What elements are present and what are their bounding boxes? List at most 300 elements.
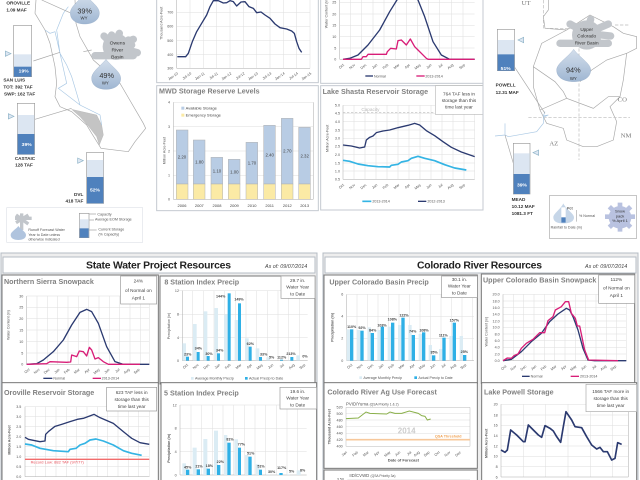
label: Powell: 12.31 MAF <box>496 90 519 95</box>
callout: to Date <box>290 291 306 296</box>
title bar: Colorado River Resources <box>417 260 542 272</box>
callout <box>107 387 157 411</box>
average monthly bars <box>182 308 300 361</box>
month labels: Jun <box>426 63 433 70</box>
month labels: Oct <box>434 450 441 457</box>
icon: Upper Colorado snowflake <box>560 19 611 50</box>
y axis labels: 20 <box>494 403 498 407</box>
month labels: Mar <box>235 363 243 370</box>
y axis labels: 20 <box>332 12 336 16</box>
bar value labels: 117% <box>277 466 287 470</box>
chart subtitle: PVID/Yuma (QSA Priority 1 & 2) <box>346 402 399 407</box>
bar value labels: 21% <box>195 465 203 469</box>
month labels <box>182 363 306 371</box>
legend: 2013-2014 <box>580 375 597 379</box>
title bar <box>325 257 636 273</box>
label: Oroville: OROVILLE <box>6 0 30 5</box>
icon: Upper Colorado drop: 94% <box>566 66 581 75</box>
tank: Mead: 39% <box>517 183 528 189</box>
callout: storage than this <box>114 397 150 402</box>
icon: Owens runoff drop: 49% <box>99 71 114 80</box>
icon: Oroville runoff drop: WY <box>81 16 88 21</box>
record low line <box>25 457 149 461</box>
callout <box>435 86 483 114</box>
2013-2014 line <box>503 302 618 361</box>
legend: storage and runoff key <box>7 208 143 242</box>
x axis labels: Jul-10 <box>182 72 192 81</box>
year labels: 2006 <box>178 203 187 208</box>
month labels: Dec <box>203 363 210 370</box>
y axis labels: 2.0 <box>495 352 500 356</box>
callout: to Date <box>290 402 306 407</box>
y axis labels: 4 <box>177 336 179 340</box>
bar value labels: 30% <box>205 352 213 356</box>
year labels: 2011 <box>265 203 275 208</box>
y axis labels: 10 <box>332 35 336 39</box>
bar values: 1.00 <box>230 169 239 174</box>
icon: Oroville runoff drop: 39% <box>77 7 92 16</box>
y axis labels: 14.0 <box>493 313 500 317</box>
y axis labels: 3.0 <box>16 415 21 419</box>
x axis labels <box>167 72 312 81</box>
year watermark: 2014 <box>398 426 416 435</box>
tank: Powell: 51% <box>501 66 511 72</box>
y axis labels: 400 <box>167 53 173 57</box>
callout: 30.1 in. <box>452 277 467 282</box>
legend: Average Monthly Precip <box>195 377 234 381</box>
y axis labels: 5 <box>21 351 23 355</box>
y axis labels: 3.5 <box>335 128 340 132</box>
legend: Average Monthly Precip <box>363 376 402 380</box>
storage line <box>177 1 302 57</box>
y axis labels: 0 <box>341 359 343 363</box>
y axis title: Million Acre-Feet <box>7 425 11 455</box>
x axis labels: Jul-14 <box>288 72 299 81</box>
x axis labels: Jul-13 <box>262 72 272 81</box>
bar value labels: 5% <box>269 356 275 360</box>
normal line <box>503 308 626 361</box>
y axis labels: 700 <box>167 11 173 15</box>
title bar: As of: 09/07/2014 <box>584 264 627 270</box>
legend: 2013-2014 <box>102 377 119 381</box>
icon: Owens runoff drop <box>92 59 121 89</box>
y axis labels: 30 <box>19 294 23 298</box>
month labels: Mar <box>393 183 401 190</box>
y axis labels: 5 <box>334 46 336 50</box>
storage line <box>501 412 622 460</box>
label: San Luis: SAN LUIS <box>3 78 25 83</box>
y axis labels: 18.0 <box>493 299 500 303</box>
y axis labels: 14 <box>494 434 498 438</box>
x axis labels: Jan-14 <box>274 72 286 81</box>
title bar: State Water Project Resources <box>86 260 231 272</box>
month labels: Oct <box>338 63 345 70</box>
legend: storage and runoff key: Year to Date unless <box>28 233 60 237</box>
y axis labels: 8 <box>177 313 179 317</box>
bar value labels: 51% <box>257 465 265 469</box>
callout: Water Year <box>286 396 310 401</box>
heading: Upper Colorado Basin Snowpack <box>483 277 596 285</box>
y axis labels: 25 <box>19 306 23 310</box>
label: San Luis: SWP: 162 TAF <box>4 91 35 96</box>
month labels: Mar <box>393 63 401 70</box>
y axis labels: 3 <box>168 125 170 129</box>
month labels: Aug <box>449 363 457 370</box>
month labels: Sep <box>299 363 306 370</box>
month labels: Feb <box>540 364 547 371</box>
legend: 2013-2014 <box>372 200 390 204</box>
state labels: CO <box>618 96 627 103</box>
y axis labels: 16.0 <box>493 306 500 310</box>
icon: Oroville runoff drop <box>70 0 99 24</box>
month labels: May <box>256 363 264 371</box>
callout: 764 TAF less in <box>443 91 475 96</box>
month labels: Sep <box>423 450 431 458</box>
y axis title: Million Acre-Feet <box>326 125 330 152</box>
month labels: Jan <box>371 183 378 190</box>
month labels: Aug <box>123 368 131 375</box>
month labels: Sep <box>458 183 466 190</box>
legend: rainfall and snowpack key: Snow <box>615 209 625 214</box>
bar value labels: 144% <box>216 294 226 298</box>
month labels: Jul <box>591 364 597 370</box>
y axis labels: 600 <box>167 25 173 29</box>
y axis labels: 2.0 <box>335 153 340 157</box>
bar values: 2.40 <box>265 152 274 157</box>
month labels <box>338 183 466 191</box>
y axis labels: 8 <box>496 465 498 469</box>
month labels: Nov <box>348 63 356 70</box>
panel: Thousand acre-feet line chart <box>157 0 318 83</box>
y axis labels: 2.0 <box>16 435 21 439</box>
panel: Oroville Reservoir Storage: Record Low: 882 TAF (9/7/77) <box>31 460 85 465</box>
month labels: Oct <box>500 364 507 371</box>
right edge divider for top charts <box>482 0 484 210</box>
month labels: Nov <box>33 368 41 375</box>
month labels: May <box>414 63 422 71</box>
label: DVL: 418 TAF <box>66 199 83 204</box>
y axis title: Precipitation (in) <box>167 313 171 339</box>
month labels: Sep <box>133 368 141 375</box>
legend: Normal <box>53 377 65 381</box>
callout <box>281 276 315 298</box>
month labels: Aug <box>447 63 454 70</box>
month labels: Dec <box>454 450 462 458</box>
bar value labels: 0% <box>302 355 308 359</box>
legend <box>359 376 453 380</box>
state labels: UT <box>522 0 531 7</box>
callout: April 1 <box>610 293 623 298</box>
tank: San Luis <box>5 25 32 77</box>
month labels: Jan <box>371 63 378 70</box>
callout <box>280 387 317 409</box>
month labels: Feb <box>63 368 71 375</box>
callout: time last year <box>118 404 146 409</box>
y axis labels: 0 <box>168 198 170 202</box>
bar value labels: 110% <box>347 325 357 329</box>
panel: Upper Colorado Basin Precip <box>324 275 477 383</box>
y axis labels: 12.0 <box>493 319 500 323</box>
month labels: Nov <box>510 364 517 372</box>
month labels: Aug <box>447 183 454 190</box>
state labels: NM <box>621 132 631 139</box>
heading: 8 Station Index Precip <box>164 278 240 286</box>
bar value labels: 112% <box>277 356 287 360</box>
label: Mead: 1081.3 FT <box>512 211 533 216</box>
panel: California map <box>3 0 146 242</box>
callout: Water Year <box>448 284 471 289</box>
legend: Actual Precip to Date <box>418 376 453 380</box>
bar value labels: 157% <box>450 318 460 322</box>
month labels: Sep <box>458 63 466 70</box>
bar value labels: 45% <box>184 465 192 469</box>
panel: Lake Shasta Reservoir Storage <box>321 86 483 210</box>
year labels: 2013 <box>300 203 310 208</box>
icon: Upper Colorado snowflake: River Basin <box>575 40 599 45</box>
heading: Colorado River Ag Use Forecast <box>327 388 437 396</box>
callout: 1566 TAF more in <box>592 389 629 394</box>
month labels: Apr <box>373 450 381 457</box>
bar value labels: 77% <box>238 443 246 447</box>
label: Mead: 10.12 MAF <box>512 204 535 209</box>
month labels: Feb <box>224 363 232 370</box>
month labels: Nov <box>348 183 356 190</box>
y axis labels: 6.0 <box>495 339 500 343</box>
panel: Colorado River map <box>495 0 637 238</box>
panel: State Water Project Resources <box>1 253 317 480</box>
x axis labels: Jan-11 <box>194 72 206 81</box>
month labels: May <box>418 363 426 371</box>
y axis labels: 0 <box>334 58 336 62</box>
map outline: California <box>35 0 146 152</box>
y axis labels: 520 <box>337 406 343 410</box>
threshold line <box>346 437 470 442</box>
panel: Colorado River Ag Use Forecast: QSA Threshold <box>435 435 461 439</box>
legend <box>522 375 597 379</box>
label: Mead: MEAD <box>512 197 526 202</box>
month labels: Jun <box>267 363 274 370</box>
icon: Owens runoff drop: WY <box>102 80 109 85</box>
title bar: As of: 09/07/2014 <box>264 264 307 270</box>
month labels: Jan <box>341 450 348 457</box>
title bar <box>3 257 315 273</box>
x axis labels: Jan-12 <box>221 72 232 81</box>
bar value labels: 213% <box>286 352 296 356</box>
panel: Northern Sierra Snowpack <box>2 275 158 383</box>
heading: MWD Storage Reserve Levels <box>159 87 260 95</box>
y axis labels: 2 <box>341 337 343 341</box>
y axis labels: 440 <box>337 432 343 436</box>
y axis labels: 8 <box>175 427 177 431</box>
legend: rainfall and snowpack key <box>549 196 637 238</box>
bar value labels: 92% <box>358 326 366 330</box>
x axis title: Date of Forecast <box>388 457 420 462</box>
month labels: Jan <box>54 368 61 375</box>
year labels: 2009 <box>230 203 240 208</box>
aqueduct network <box>45 7 102 125</box>
y axis labels: 12 <box>494 444 498 448</box>
legend: storage and runoff key: Runoff Forecast Water <box>28 228 66 232</box>
bar value labels: 62% <box>247 342 255 346</box>
year labels: 2010 <box>248 203 257 208</box>
icon: Owens River Basin snowflake <box>95 33 137 61</box>
bar value labels: 74% <box>409 329 417 333</box>
actual precip bars <box>186 293 293 361</box>
label: DVL: DVL <box>74 192 83 197</box>
y axis labels: 0.0 <box>16 475 21 479</box>
month labels: Dec <box>360 63 367 70</box>
y axis labels: 0.5 <box>335 178 340 182</box>
y axis labels: 1.5 <box>16 445 21 449</box>
bar value labels: 25% <box>461 350 469 354</box>
tank: Powell <box>497 29 524 72</box>
callout: of Normal on <box>125 288 152 293</box>
x axis labels: Jul-11 <box>209 72 219 80</box>
panel: 5 Station Index Precip <box>161 383 317 480</box>
bar value labels: 149% <box>234 298 244 302</box>
month labels: May <box>414 183 422 191</box>
legend: 2012-2013 <box>427 200 445 204</box>
month labels: Jul <box>406 450 412 456</box>
legend: 2013-2014 <box>425 74 443 78</box>
state labels: AZ <box>549 140 558 147</box>
bar value labels: 35% <box>430 351 438 355</box>
month labels: Mar <box>398 363 406 370</box>
legend: storage and runoff key: (% Capacity) <box>98 232 119 236</box>
month labels: Dec <box>360 183 367 190</box>
bar values: 1.80 <box>195 160 204 165</box>
y axis labels: 460 <box>337 425 343 429</box>
average monthly bars <box>182 431 301 475</box>
y axis title: Thousand Acre-Feet <box>327 408 331 444</box>
tank: Castaic: 39% <box>22 142 32 148</box>
legend <box>362 200 445 204</box>
month labels: Jun <box>426 183 433 190</box>
icon: Owens River Basin snowflake: Owens <box>110 40 126 46</box>
bar value labels: 81% <box>226 437 234 441</box>
month labels: Jun <box>104 368 111 375</box>
legend: rainfall and snowpack key: pack <box>616 213 624 218</box>
bar value labels: 18% <box>206 464 214 468</box>
tank: DVL <box>78 152 104 203</box>
bar value labels: 5% <box>289 469 295 473</box>
month labels: Dec <box>43 368 51 375</box>
month labels <box>341 450 462 458</box>
month labels: Nov <box>356 363 364 370</box>
heading: Oroville Reservoir Storage <box>4 389 94 397</box>
tank: Mead <box>513 143 539 194</box>
month labels: Oct <box>24 368 31 374</box>
month labels: Apr <box>404 183 412 190</box>
icon: Owens River Basin snowflake: Basin <box>111 55 124 61</box>
panel: 8 Station Index Precip <box>160 276 315 384</box>
icon: Upper Colorado drop <box>557 49 591 82</box>
legend: storage and runoff key: Average EOM Storage <box>95 218 132 222</box>
month labels: Jan <box>214 363 221 370</box>
month labels: Mar <box>73 367 81 375</box>
legend: storage and runoff key: otherwise indicated <box>28 238 60 242</box>
x axis labels: Jul-12 <box>235 72 246 81</box>
month labels: Sep <box>460 363 467 370</box>
y axis labels: 4.0 <box>495 346 500 350</box>
river <box>495 112 548 137</box>
callout <box>599 275 635 303</box>
y axis labels: 0.5 <box>16 465 21 469</box>
month labels: Jun <box>394 450 401 457</box>
callout <box>442 276 477 298</box>
label: Oroville: 1.09 MAF <box>6 7 27 12</box>
actual precip bars <box>350 318 466 361</box>
month labels: Jan <box>530 364 537 371</box>
y axis title: Water Content (in) <box>484 317 488 347</box>
y axis labels: 400 <box>337 445 343 449</box>
legend: rainfall and snowpack key: % April 1 <box>612 218 629 223</box>
bar values: 1.10 <box>213 168 222 173</box>
y axis labels: 2.5 <box>335 145 340 149</box>
month labels: Jun <box>580 364 587 371</box>
year labels: 2007 <box>195 203 205 208</box>
y axis title: Million Acre-Feet <box>162 137 166 164</box>
callout: 29.7 in. <box>290 278 305 283</box>
year labels: 2012 <box>283 203 293 208</box>
callout: 19.6 in. <box>290 389 305 394</box>
label: San Luis: TOT: 392 TAF <box>3 84 33 89</box>
stacked bars <box>176 118 310 199</box>
y axis labels: 3.5 <box>16 405 21 409</box>
month labels: Jul <box>437 183 444 189</box>
bar values: 2.20 <box>178 154 187 159</box>
month labels: Mar <box>550 364 558 371</box>
bar value labels: 108% <box>388 318 398 322</box>
icon: Upper Colorado snowflake: Colorado <box>577 34 597 39</box>
month labels: Feb <box>388 363 395 370</box>
month labels: Apr <box>404 63 412 70</box>
panel: Upper Colorado Basin Snowpack <box>481 274 635 383</box>
bar value labels: 34% <box>195 346 203 350</box>
y axis labels: 1.0 <box>335 169 340 173</box>
month labels: Jul <box>437 63 444 69</box>
month labels: Oct <box>338 183 345 190</box>
y axis labels: 4 <box>175 450 177 454</box>
y axis labels: 1.0 <box>16 455 21 459</box>
2013-2014 line <box>27 347 140 364</box>
month labels: May <box>93 368 101 375</box>
legend <box>181 106 222 118</box>
panel: snowpack chart top <box>321 0 483 83</box>
legend: rainfall and snowpack key: Rainfall to Date (in) <box>551 225 582 229</box>
month labels: Apr <box>84 367 91 374</box>
y axis labels: 18 <box>494 413 498 417</box>
icon: Upper Colorado snowflake: Upper <box>580 27 593 32</box>
month labels: Jun <box>429 363 436 370</box>
month labels: Dec <box>520 364 527 372</box>
month labels: Aug <box>600 364 607 372</box>
panel: IID/CVWD chart <box>324 470 477 480</box>
month labels: Dec <box>367 363 374 370</box>
legend: Available Storage <box>186 106 218 111</box>
callout: April 1 <box>132 295 145 300</box>
month labels: Aug <box>413 450 421 458</box>
y axis title: Thousand Acre-Feet <box>160 7 164 40</box>
tank: San Luis: 19% <box>19 68 29 74</box>
month labels: Apr <box>409 363 416 370</box>
legend: Actual Precip to Date <box>249 377 283 381</box>
bar value labels: 8% <box>300 469 306 473</box>
month labels: Oct <box>182 363 189 370</box>
y axis labels: 12 <box>173 403 177 407</box>
callout <box>586 384 637 412</box>
y axis title: Precipitation (in) <box>167 433 171 463</box>
